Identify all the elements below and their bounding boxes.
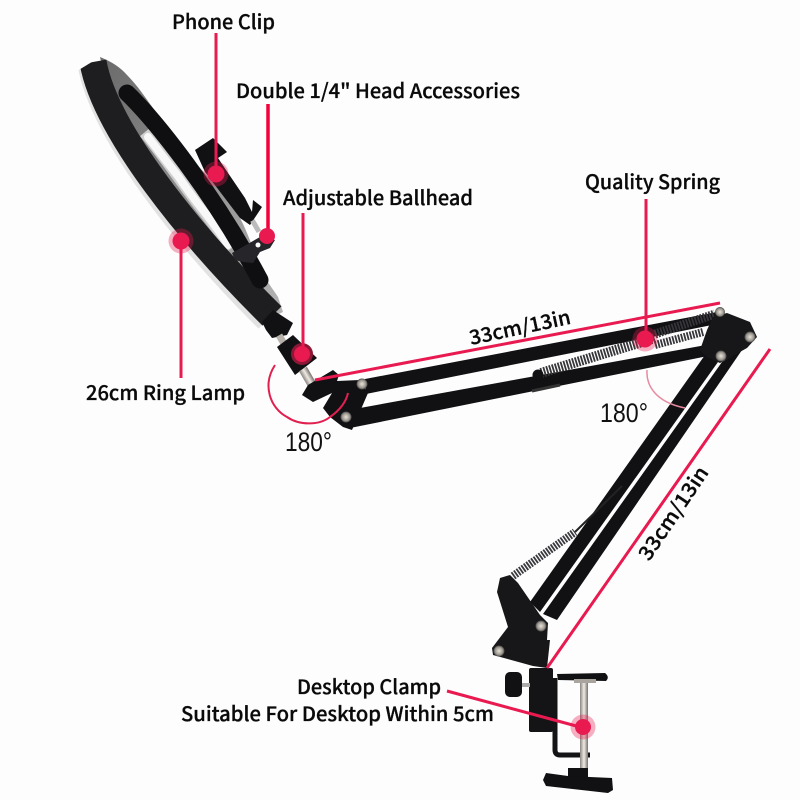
ring top edge cut bbox=[72, 50, 100, 74]
label: ring lamp: 26cm Ring Lamp bbox=[86, 377, 245, 406]
pointer: ring lamp bbox=[168, 228, 194, 378]
ring dark outer band bbox=[93, 62, 272, 316]
label: phone clip: Phone Clip bbox=[172, 6, 275, 35]
label: ball head rotation: 180° bbox=[285, 427, 332, 457]
ring lamp bbox=[72, 50, 283, 322]
ring black inner band bbox=[127, 93, 260, 280]
pointer: quality spring bbox=[632, 199, 658, 352]
lower arm bars bbox=[530, 350, 742, 620]
ring mount bracket bbox=[232, 237, 275, 263]
label: lower arm length: 33cm/13in bbox=[630, 460, 714, 565]
label: arm joint rotation: 180° bbox=[600, 398, 648, 428]
ring white diffuser rim bbox=[91, 64, 268, 319]
rotation arc: ball head bbox=[269, 365, 348, 423]
label: desktop clamp: Desktop Clamp bbox=[297, 671, 441, 700]
spring on lower arm bbox=[513, 486, 622, 576]
ring light strip beside opening bbox=[145, 132, 232, 248]
label: quality spring: Quality Spring bbox=[585, 166, 720, 195]
dimension line: lower arm bbox=[547, 349, 770, 668]
pointer: ballhead bbox=[294, 213, 310, 362]
label: clamp range: Suitable For Desktop Within 5cm bbox=[181, 698, 494, 727]
pointer: double head accessories bbox=[259, 104, 275, 244]
pointer: desktop clamp bbox=[447, 691, 596, 740]
ball head with collar bbox=[262, 310, 317, 387]
ring opening bbox=[148, 137, 228, 245]
lower arm bracket bbox=[492, 575, 550, 668]
label: upper arm length: 33cm/13in bbox=[466, 301, 573, 351]
label: double head accessories: Double 1/4" Head Accessories bbox=[236, 75, 520, 104]
label: adjustable ballhead: Adjustable Ballhead bbox=[283, 182, 473, 211]
phone clip bbox=[195, 138, 262, 233]
right arm bracket bbox=[700, 307, 757, 363]
upper arm bars bbox=[350, 312, 722, 428]
quality spring on upper arm bbox=[532, 314, 715, 391]
dimension line: upper arm bbox=[315, 303, 720, 380]
desktop clamp bbox=[505, 668, 613, 793]
ring gray front face bbox=[100, 57, 283, 322]
pointer: phone clip bbox=[204, 33, 228, 186]
left arm bracket bbox=[302, 370, 368, 430]
rotation arc: arm joint bbox=[647, 370, 685, 408]
